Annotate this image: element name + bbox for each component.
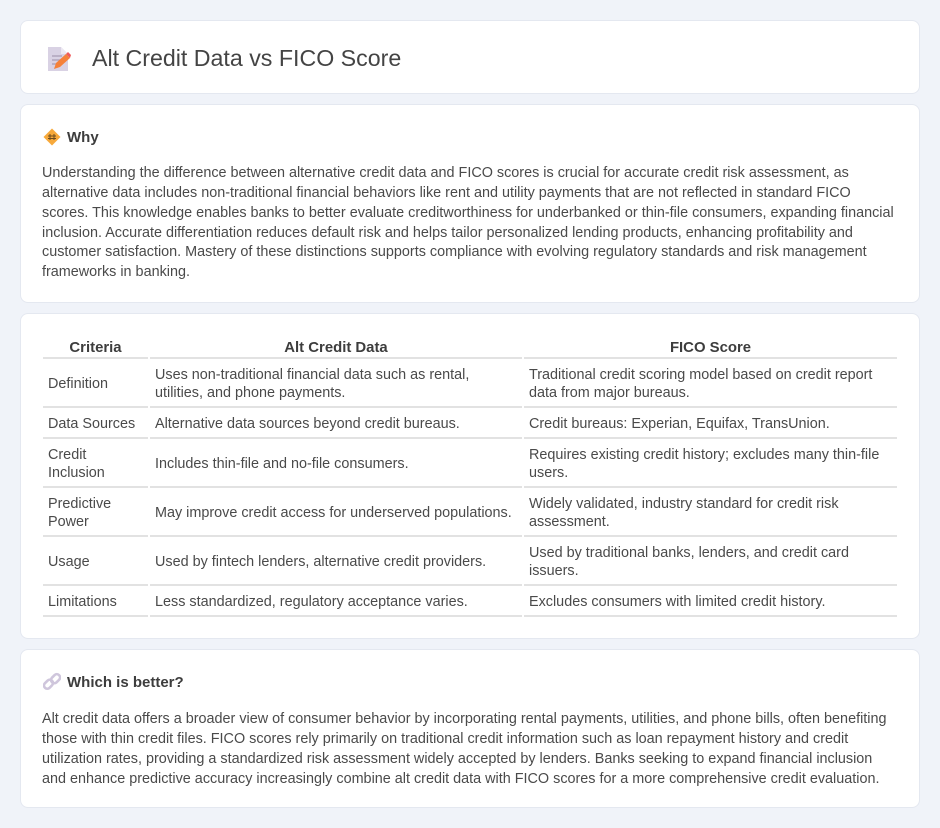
text block: why paragraph: scores. This knowledge enables banks to better evaluate creditworthiness for underbanked or thin-file consumers, expanding financial	[42, 205, 894, 221]
cell: Used by traditional banks, lenders, and credit card	[529, 545, 849, 561]
text block: why paragraph: customer satisfaction. Mastery of these distinctions supports compliance with evolving regulatory standards and risk management	[42, 244, 867, 260]
text block: which is better paragraph	[42, 711, 886, 786]
cell: utilities, and phone payments.	[155, 385, 345, 401]
cell	[529, 367, 872, 401]
icon: chain link	[43, 672, 61, 690]
text block: which is better paragraph: those with thin credit files. FICO scores rely primarily on traditional credit information such as loan repayment history and credit	[42, 731, 848, 747]
cell	[155, 367, 469, 401]
text block: why paragraph: frameworks in banking.	[42, 264, 190, 280]
text block: why paragraph	[42, 165, 894, 280]
icon: document with pencil	[48, 47, 71, 71]
cell: Excludes consumers with limited credit history.	[529, 594, 825, 610]
cell: Alternative data sources beyond credit bureaus.	[155, 416, 460, 432]
cell: Traditional credit scoring model based on credit report	[529, 367, 872, 383]
row: limitations: Limitations	[48, 594, 117, 610]
text block: why paragraph: inclusion. Accurate differentiation reduces default risk and helps tailor personalized lending products, enhancing profitability and	[42, 224, 853, 240]
panel: which is better	[20, 649, 920, 808]
cell	[529, 447, 879, 481]
cell: Uses non-traditional financial data such as rental,	[155, 367, 469, 383]
cell: assessment.	[529, 514, 610, 530]
cell: Used by fintech lenders, alternative credit providers.	[155, 554, 486, 570]
cell: data from major bureaus.	[529, 385, 690, 401]
cell: Includes thin-file and no-file consumers.	[155, 456, 409, 472]
row: credit inclusion: Inclusion	[48, 465, 105, 481]
row: predictive power: Power	[48, 514, 89, 530]
heading: why: Why	[67, 129, 99, 146]
table header: fico score: FICO Score	[670, 340, 751, 356]
heading: which is better: Which is better?	[67, 674, 184, 691]
text block: which is better paragraph: Alt credit data offers a broader view of consumer behavior by incorporating rental payments, utilities, and phone bills, often benefiting	[42, 711, 886, 727]
cell	[529, 496, 839, 530]
table header: criteria: Criteria	[69, 340, 122, 356]
panel: title header	[20, 20, 920, 94]
panel: why	[20, 104, 920, 303]
cell: May improve credit access for underserved populations.	[155, 505, 512, 521]
cell: Less standardized, regulatory acceptance varies.	[155, 594, 468, 610]
row: credit inclusion: Credit	[48, 447, 86, 463]
text block: why paragraph: alternative data includes non-traditional financial behaviors like rent and utility payments that are not reflected in standard FICO	[42, 185, 851, 201]
text block: why paragraph: Understanding the difference between alternative credit data and FICO scores is crucial for accurate credit risk assessment, as	[42, 165, 849, 181]
cell: Credit bureaus: Experian, Equifax, TransUnion.	[529, 416, 830, 432]
cell: Requires existing credit history; excludes many thin-file	[529, 447, 879, 463]
text block: which is better paragraph: utilization rates, providing a standardized risk assessment widely accepted by lenders. Banks seeking to expand financial inclusion	[42, 751, 872, 767]
cell	[529, 545, 849, 579]
row: definition: Definition	[48, 376, 108, 392]
cell: issuers.	[529, 563, 579, 579]
cell: users.	[529, 465, 568, 481]
icon: warning diamond	[44, 128, 60, 146]
table header: alt credit data: Alt Credit Data	[284, 340, 388, 356]
cell: Widely validated, industry standard for credit risk	[529, 496, 839, 512]
row: predictive power	[48, 496, 111, 530]
row: data sources: Data Sources	[48, 416, 135, 432]
row: usage: Usage	[48, 554, 90, 570]
text block: which is better paragraph: and enhance predictive accuracy increasingly combine alt credit data with FICO scores for a more comprehensive credit evaluation.	[42, 770, 879, 786]
title: Alt Credit Data vs FICO Score	[92, 45, 401, 71]
row: credit inclusion	[48, 447, 105, 481]
row: predictive power: Predictive	[48, 496, 111, 512]
panel: comparison table	[20, 313, 920, 639]
